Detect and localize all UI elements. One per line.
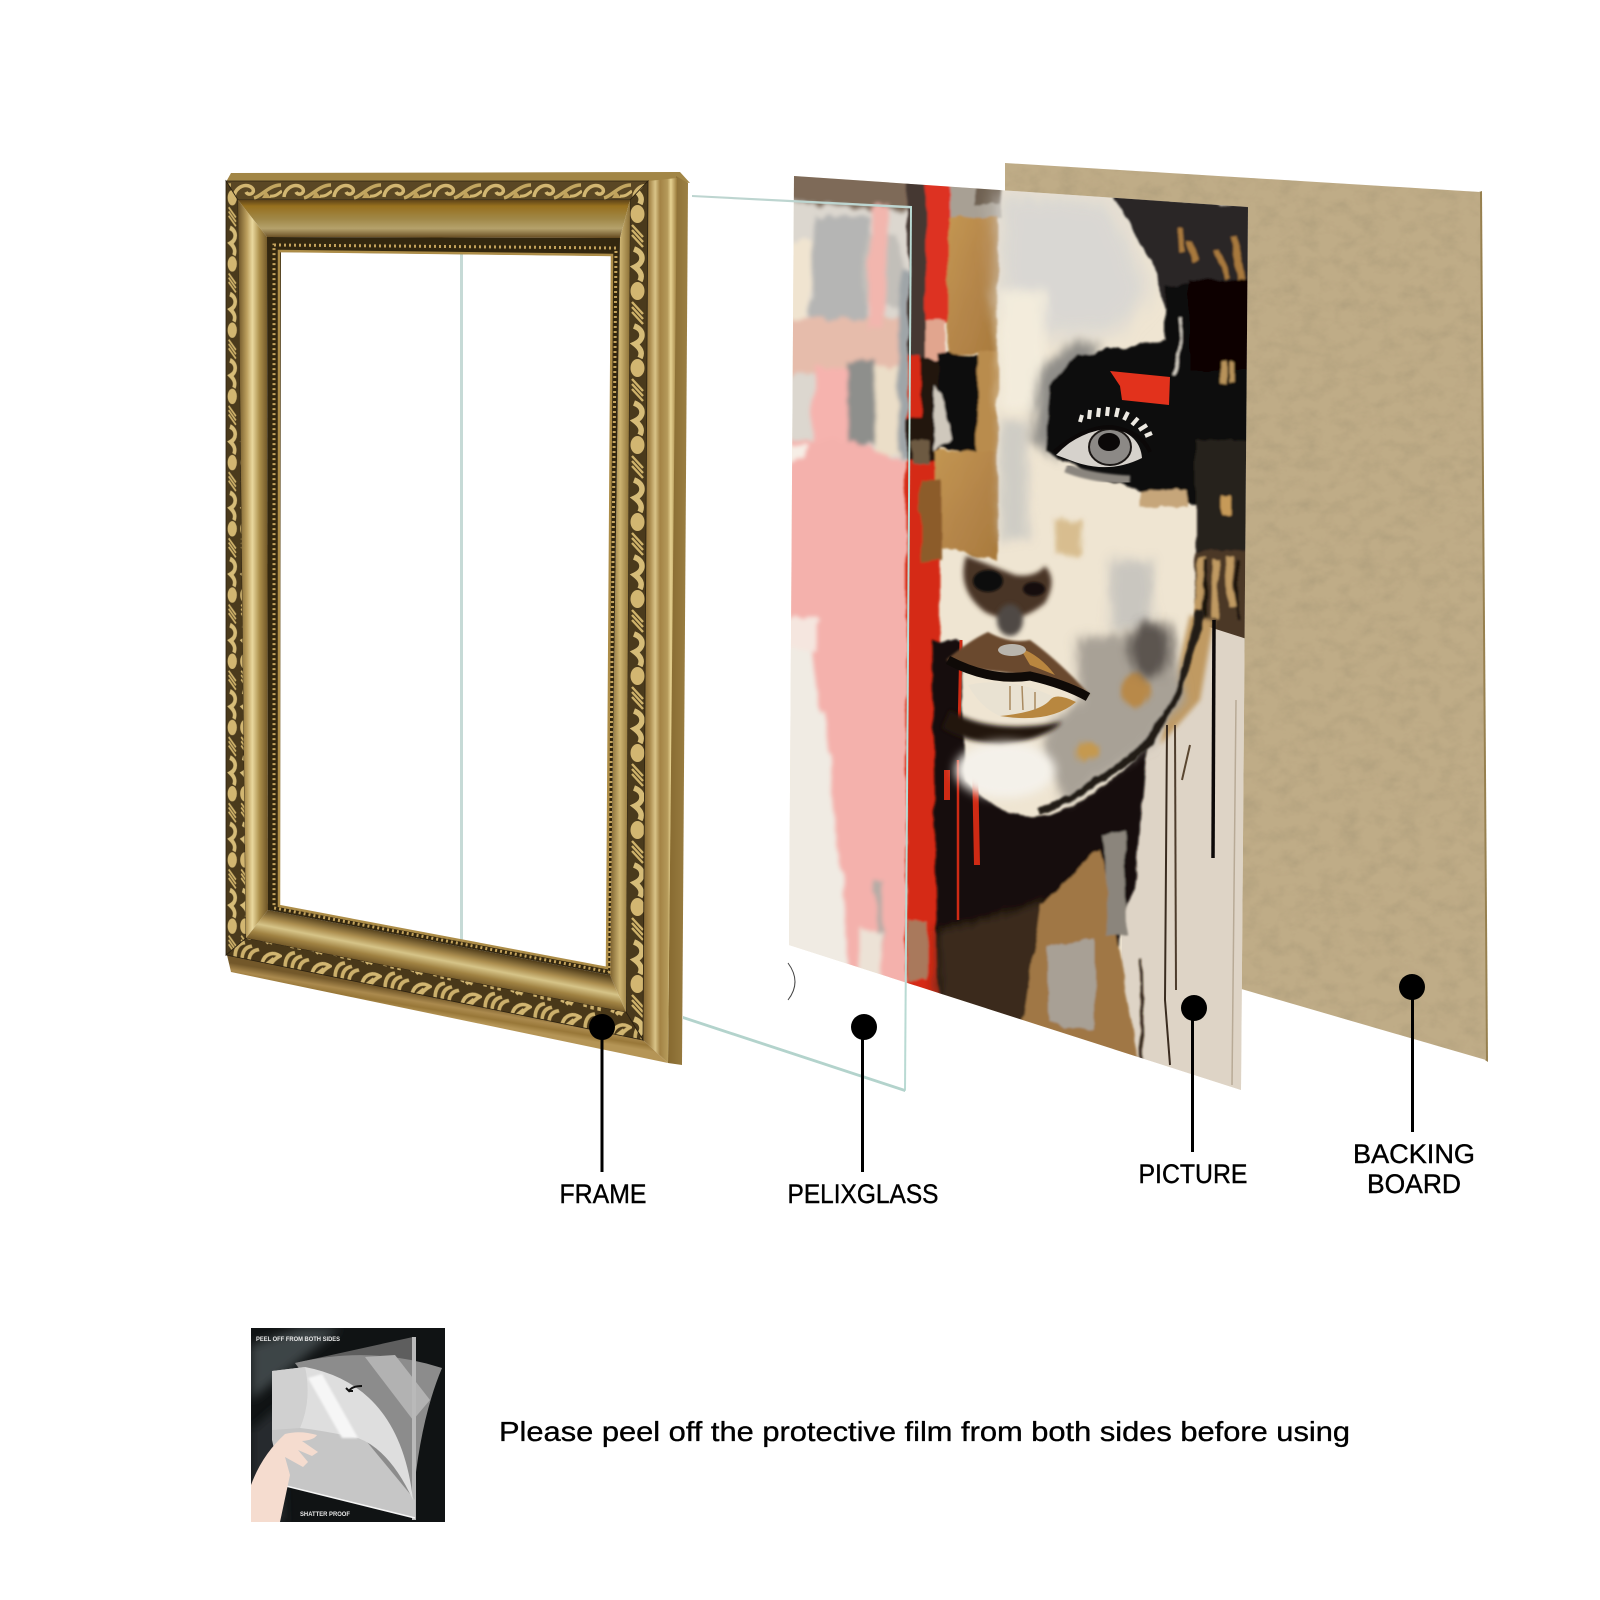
hand: [251, 1432, 318, 1522]
face: forehead and skin: [998, 190, 1152, 630]
callout: backing board: BOARD: [1367, 1169, 1461, 1199]
glass seen through frame: [460, 252, 463, 942]
glass sheet: [295, 1337, 412, 1368]
thumbnail: peel off protective film: SHATTER PROOF: [300, 1511, 350, 1518]
callout: frame: FRAME: [560, 1179, 646, 1209]
pelixglass pane: [460, 195, 912, 1092]
callout: frame: [560, 1014, 646, 1209]
red swatch on brow: [1110, 371, 1170, 405]
frame right gold band: [643, 178, 677, 1063]
soft grey smear left of brow: [1030, 340, 1100, 460]
backing board: [1005, 163, 1488, 1062]
frame top sliver: [226, 172, 690, 183]
frame bottom gold band: [227, 955, 668, 1063]
small arc mark: [788, 963, 795, 1000]
glass bottom edge: [683, 1016, 905, 1092]
gold leaf blocks: [912, 217, 998, 562]
hair and black block: [1045, 195, 1260, 560]
frame: [226, 172, 690, 1065]
glossy inner bevels: [238, 200, 630, 1012]
lips: [942, 632, 1090, 745]
red drips: [947, 640, 977, 920]
nose: [963, 556, 1052, 636]
board edge: [1479, 191, 1488, 1062]
callout: picture: [1138, 995, 1248, 1189]
callout: backing board: BACKING: [1353, 1139, 1475, 1169]
neck shadow and dark hair: [932, 640, 1148, 1066]
right neck background: [1120, 625, 1250, 1100]
callout: picture: PICTURE: [1138, 1159, 1248, 1189]
eye: [1054, 407, 1152, 480]
chin: [955, 742, 1055, 798]
thumbnail: peel off protective film: [251, 1328, 445, 1522]
instruction text: Please peel off the protective film from both sides before using: [499, 1416, 1350, 1447]
arrow: [346, 1386, 362, 1391]
board surface: [1005, 163, 1486, 1060]
black drips: [1165, 620, 1236, 1085]
red and dark collage columns: [906, 175, 1002, 1012]
thumbnail: peel off protective film: PEEL OFF FROM BOTH SIDES: [256, 1336, 341, 1343]
left side seen through glass: [789, 176, 916, 985]
glass right edge: [904, 206, 912, 1091]
frame right side: [668, 176, 688, 1065]
protective film: [272, 1367, 415, 1518]
callout: pelixglass: [788, 1014, 938, 1209]
glass top edge: [692, 195, 912, 208]
hair lower right: [1192, 548, 1246, 651]
picture: abstract portrait painting: [770, 160, 1260, 1100]
cheek and jaw tones: [1040, 610, 1200, 812]
inner dotted lip: [267, 237, 620, 975]
callout: backing board: [1353, 974, 1475, 1199]
ornament strips: [226, 181, 648, 1040]
lower sheet edge: [282, 1485, 415, 1518]
callout: pelixglass: PELIXGLASS: [788, 1179, 938, 1209]
